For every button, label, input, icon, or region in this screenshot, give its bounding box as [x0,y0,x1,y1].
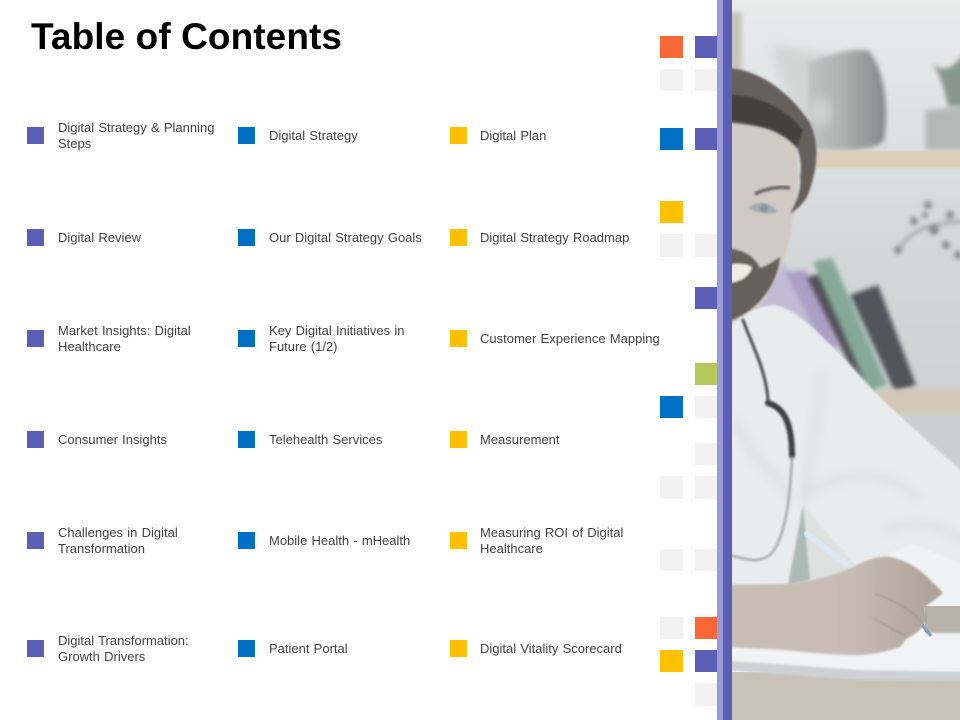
item: Challenges in Digital Transformation: Transformation [58,541,145,556]
photo: smiling doctor writing at a desk [732,0,960,720]
pen [807,534,853,569]
item: Digital Transformation: Growth Drivers: Digital Transformation: [58,633,189,648]
item: Digital Review: Digital Review [58,230,141,245]
wall shelf [814,151,960,168]
stethoscope [720,320,792,560]
white coat [720,305,960,610]
item: Digital Strategy Roadmap: Digital Strategy Roadmap [480,230,629,245]
item: Digital Strategy & Planning Steps [27,120,214,151]
hair [720,68,816,214]
item: Digital Strategy: Digital Strategy [269,128,358,143]
item: Our Digital Strategy Goals: Our Digital Strategy Goals [269,230,422,245]
item: Key Digital Initiatives in Future (1/2): Future (1/2) [269,339,338,354]
item: Consumer Insights: Consumer Insights [58,432,167,447]
desk and notebook [720,606,960,720]
item: Digital Strategy & Planning Steps: Digital Strategy & Planning [58,120,214,135]
item: Market Insights: Digital Healthcare: Market Insights: Digital [58,323,191,338]
item: Digital Plan [450,127,546,144]
item: Market Insights: Digital Healthcare: Healthcare [58,339,121,354]
blurred twig [894,201,960,259]
item: Digital Transformation: Growth Drivers [27,633,189,664]
vase on shelf [770,45,886,150]
item: Customer Experience Mapping: Customer Experience Mapping [480,331,660,346]
plant and pot [925,52,960,150]
item: Digital Transformation: Growth Drivers: Growth Drivers [58,649,145,664]
shirt cuff [888,545,960,610]
decorative square grid [660,36,717,706]
item: Measurement: Measurement [480,432,559,447]
item: Challenges in Digital Transformation [27,525,178,556]
background wall [720,0,960,560]
item: Telehealth Services: Telehealth Services [269,432,382,447]
item: Key Digital Initiatives in Future (1/2): Key Digital Initiatives in [269,323,404,338]
item: Consumer Insights [27,431,167,448]
item: Digital Vitality Scorecard: Digital Vitality Scorecard [480,641,622,656]
writing hand [720,557,943,655]
item: Measuring ROI of Digital Healthcare: Healthcare [480,541,543,556]
item: Digital Strategy & Planning Steps: Steps [58,136,91,151]
item: Measurement [450,431,560,448]
item: Digital Review [27,229,141,246]
item: Patient Portal [238,640,348,657]
face and neck [720,110,799,330]
item: Measuring ROI of Digital Healthcare: Measuring ROI of Digital [480,525,623,540]
item: Mobile Health - mHealth: Mobile Health - mHealth [269,533,410,548]
item: Challenges in Digital Transformation: Challenges in Digital [58,525,178,540]
item: Digital Strategy [238,127,358,144]
item: Key Digital Initiatives in Future (1/2) [238,323,404,354]
item: Digital Plan: Digital Plan [480,128,546,143]
dark purple vertical bar [723,0,732,720]
light purple vertical bar [717,0,723,720]
blurred books [755,258,916,392]
item: Patient Portal: Patient Portal [269,641,348,656]
lower shelf [878,389,960,484]
beard and smile [720,248,780,326]
gap between arm and body [788,505,860,585]
eye and eyebrow [748,187,790,214]
item: Market Insights: Digital Healthcare [27,323,191,354]
title: Table of Contents [31,16,342,57]
contents list [27,120,660,664]
coat folds [735,370,960,540]
item: Measuring ROI of Digital Healthcare [450,525,623,556]
item: Telehealth Services [238,431,382,448]
